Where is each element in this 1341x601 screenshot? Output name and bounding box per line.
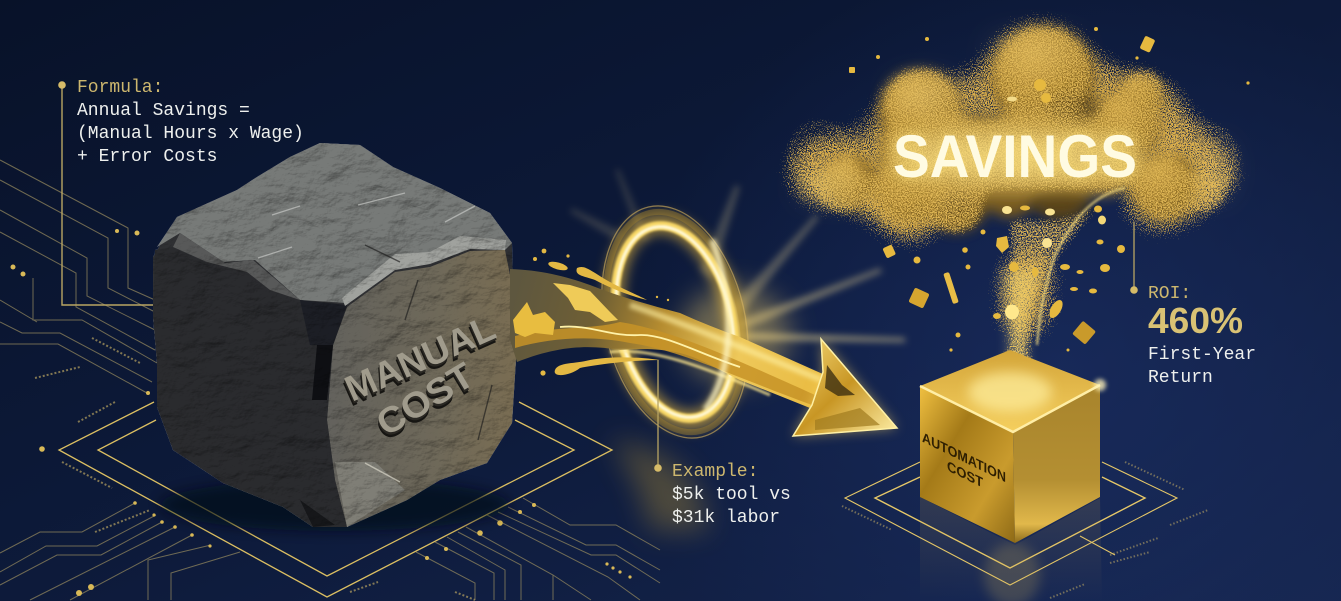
callout: formula: Annual Savings = <box>77 101 250 121</box>
rock ground shadow <box>160 479 510 531</box>
callout: example: $31k labor <box>672 508 780 528</box>
swirl strand <box>1037 188 1125 345</box>
droplets <box>533 249 669 376</box>
rock label: manual cost <box>336 307 503 449</box>
gold nuggets <box>849 27 1250 352</box>
cube label: COST <box>947 459 983 492</box>
automation cost cube <box>920 350 1106 543</box>
cube label: AUTOMATION <box>922 430 1006 486</box>
callout: roi <box>1130 222 1256 388</box>
sand grain layer <box>790 21 1236 395</box>
arrowhead <box>793 339 897 436</box>
callout: formula: + Error Costs <box>77 147 217 167</box>
rock label: manual cost: COST <box>368 359 480 449</box>
sparse sand halo <box>775 10 1250 350</box>
cube reflection <box>920 497 1102 601</box>
rock label: manual cost: MANUAL <box>337 312 500 414</box>
callout: roi: Return <box>1148 368 1213 388</box>
cube highlights <box>920 385 1100 432</box>
callout: roi: 460% <box>1148 300 1243 341</box>
column bright core <box>995 270 1040 400</box>
callout: roi: ROI: <box>1148 284 1191 304</box>
cube left face <box>920 386 1015 543</box>
circuit board nodes and dashes <box>10 229 632 596</box>
callout: formula <box>58 78 304 305</box>
golden ring <box>580 191 770 453</box>
savings label: SAVINGS <box>893 123 1137 190</box>
light rays from ring <box>570 169 905 394</box>
manual cost rock <box>153 143 517 531</box>
circuit board diamond around rock <box>59 402 612 597</box>
cloud highlights <box>804 38 1227 195</box>
floor glow under ring <box>610 440 708 530</box>
golden stream arrow <box>510 249 897 436</box>
gold flakes <box>553 283 618 322</box>
savings cloud <box>775 10 1250 400</box>
rock body <box>153 143 517 527</box>
callout: roi: First-Year <box>1148 345 1256 365</box>
callout: example: Example: <box>672 462 758 482</box>
arrowhead glow <box>793 339 897 436</box>
cloud core puffs <box>824 28 1197 232</box>
rock label: manual cost: MANUAL <box>339 307 501 409</box>
rock cracks <box>258 193 492 482</box>
rock label: manual cost: COST <box>369 354 481 444</box>
callout: example <box>654 360 791 528</box>
callout: formula: (Manual Hours x Wage) <box>77 124 304 144</box>
stream body <box>510 269 825 408</box>
cube right face <box>1013 385 1100 543</box>
cube top face <box>920 350 1100 432</box>
callout: formula: Formula: <box>77 78 163 98</box>
callout: example: $5k tool vs <box>672 485 791 505</box>
rock label: manual cost: COST <box>369 357 481 446</box>
savings label: SAVINGS <box>893 123 1137 190</box>
dark cloud hollows <box>938 92 1103 221</box>
ring front highlight <box>705 240 728 410</box>
rock label: manual cost: MANUAL <box>338 309 501 412</box>
platform under automation cube <box>842 462 1208 598</box>
circuit board traces: left side <box>0 160 660 600</box>
